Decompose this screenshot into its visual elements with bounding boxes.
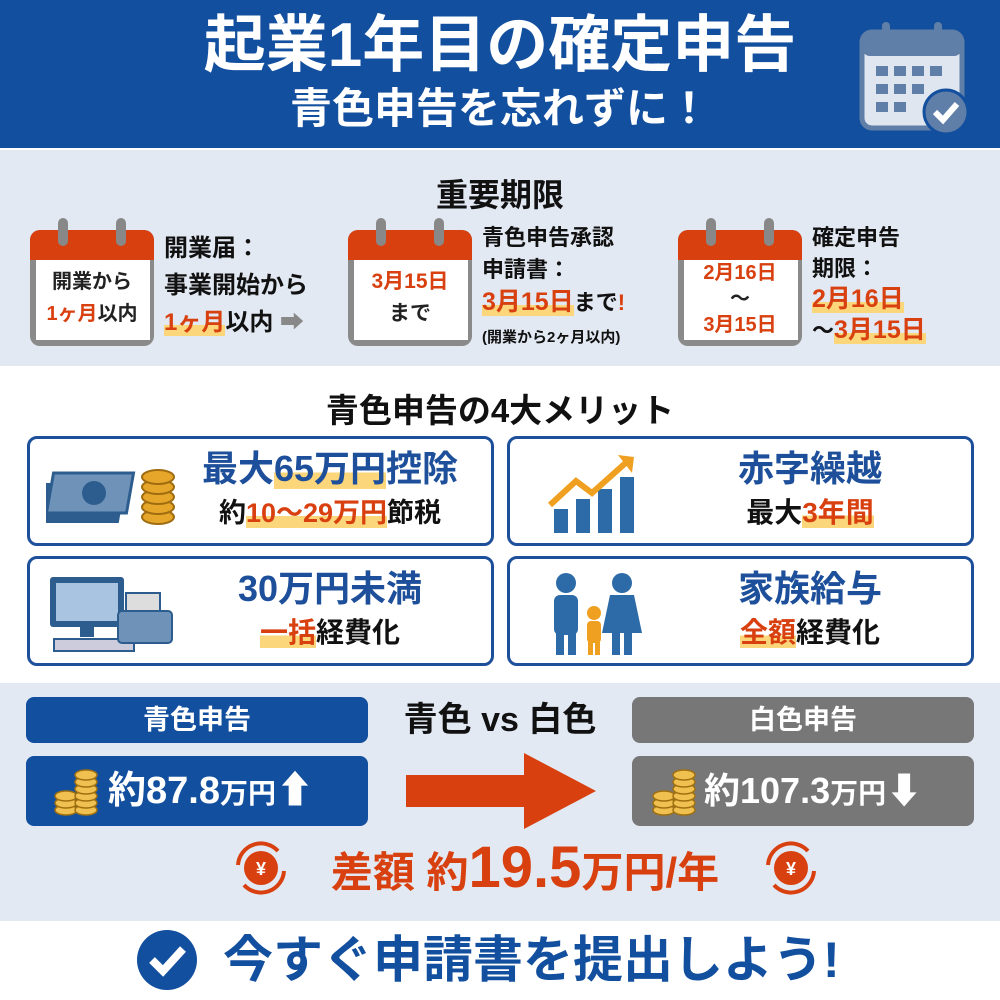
icon: calendar 3 bbox=[678, 218, 802, 346]
icon: calendar 2 bbox=[348, 218, 472, 346]
text: filing deadline: 確定申告 bbox=[812, 225, 900, 250]
icon: coins bbox=[652, 769, 696, 816]
value: blue bbox=[26, 756, 368, 826]
panel: deadlines bbox=[0, 150, 1000, 366]
panel: comparison bbox=[0, 683, 1000, 921]
text: 30万円未満 bbox=[238, 568, 422, 609]
icon: calendar 2: まで bbox=[389, 302, 431, 325]
text: blue application: 青色申告承認 bbox=[482, 225, 614, 250]
icon: calendar 3: ～ bbox=[730, 288, 750, 310]
text: opening notice: 事業開始から bbox=[164, 272, 308, 299]
text: blue application bbox=[482, 225, 625, 346]
label: blue bbox=[26, 697, 368, 743]
text: blue application: 3月15日まで! bbox=[482, 288, 625, 316]
heading: 重要期限 bbox=[436, 177, 564, 213]
icon: yen cycle right bbox=[766, 841, 816, 895]
heading: vs: 青色 vs 白色 bbox=[404, 701, 596, 739]
icon: calendar 3: 3月15日 bbox=[703, 314, 777, 336]
icon: check circle bbox=[137, 930, 197, 990]
icon: calendar check bbox=[860, 22, 966, 132]
difference: 差額 約19.5万円/年 bbox=[331, 835, 719, 900]
icon: calendar 1: 1ヶ月以内 bbox=[46, 303, 138, 325]
icon: yen cycle left: ¥ bbox=[256, 859, 266, 879]
text bbox=[238, 568, 422, 648]
icon: calendar 1: 開業から bbox=[52, 271, 132, 293]
icon: computer bbox=[50, 577, 173, 652]
value: white bbox=[632, 756, 974, 826]
arrow bbox=[406, 753, 596, 829]
label: white: 白色申告 bbox=[749, 705, 857, 735]
text: 家族給与 bbox=[738, 568, 882, 609]
text: blue application: 申請書： bbox=[482, 257, 570, 282]
card: family salary bbox=[507, 556, 974, 666]
icon: chart bbox=[548, 455, 634, 533]
icon: family bbox=[554, 573, 642, 655]
label: blue: 青色申告 bbox=[143, 705, 251, 735]
text: 最大65万円控除 bbox=[202, 448, 458, 489]
text: filing deadline: 2月16日 bbox=[812, 285, 904, 313]
title: 起業1年目の確定申告 bbox=[204, 11, 796, 80]
text: 一括経費化 bbox=[260, 617, 400, 648]
header bbox=[0, 0, 1000, 148]
text bbox=[738, 568, 882, 648]
text: 全額経費化 bbox=[740, 617, 880, 648]
value: blue: 約87.8万円⬆ bbox=[108, 770, 314, 812]
text bbox=[202, 448, 458, 528]
text: filing deadline bbox=[812, 225, 926, 344]
text: blue application: (開業から2ヶ月以内) bbox=[482, 329, 620, 346]
card: loss carryforward bbox=[507, 436, 974, 546]
icon: calendar 3: 2月16日 bbox=[703, 262, 777, 284]
text: 赤字繰越 bbox=[738, 448, 882, 489]
text: opening notice: 開業届： bbox=[164, 235, 260, 262]
icon: coins bbox=[54, 769, 98, 816]
card: under 300k bbox=[27, 556, 494, 666]
text: opening notice: 1ヶ月以内 ➡ bbox=[164, 309, 304, 336]
text: opening notice bbox=[164, 235, 308, 336]
icon: calendar 2: 3月15日 bbox=[371, 270, 449, 293]
card: deduction bbox=[27, 436, 494, 546]
text bbox=[738, 448, 882, 528]
call to action: 今すぐ申請書を提出しよう! bbox=[223, 932, 840, 988]
value: white: 約107.3万円⬇ bbox=[704, 770, 922, 811]
subtitle: 青色申告を忘れずに！ bbox=[290, 85, 710, 132]
text: 約10～29万円節税 bbox=[219, 498, 441, 528]
heading: merits: 青色申告の4大メリット bbox=[326, 392, 674, 429]
icon: yen cycle left bbox=[236, 841, 286, 895]
icon: money bbox=[46, 469, 175, 525]
label: white bbox=[632, 697, 974, 743]
icon: calendar 1 bbox=[30, 218, 154, 346]
icon: yen cycle right: ¥ bbox=[786, 859, 796, 879]
text: filing deadline: 期限： bbox=[812, 256, 878, 281]
text: 最大3年間 bbox=[746, 497, 874, 528]
text: filing deadline: ～3月15日 bbox=[812, 316, 926, 344]
